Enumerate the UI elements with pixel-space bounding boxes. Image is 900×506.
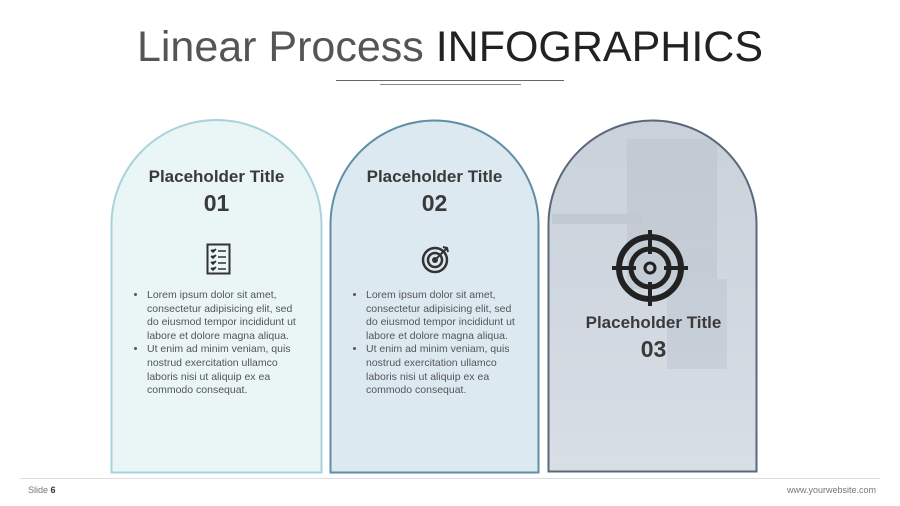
card 2 heading: [367, 167, 502, 216]
card 2 bullets: Ut enim ad minim veniam, quis nostrud exercitation ullamco laboris nisi ut aliquip ex ea commodo consequat.: [366, 343, 510, 396]
card 1 bullets: Lorem ipsum dolor sit amet, consectetur adipisicing elit, sed do eiusmod tempor incididunt ut labore et dolore magna aliqua.: [147, 289, 296, 342]
card 1 bullets: [134, 289, 296, 396]
card 1 bullets: Ut enim ad minim veniam, quis nostrud exercitation ullamco laboris nisi ut aliquip ex ea commodo consequat.: [147, 343, 291, 396]
card 1 heading: Placeholder Title: [149, 167, 284, 186]
card 3 heading: Placeholder Title: [586, 313, 721, 332]
footer: slide number: Slide 6: [28, 485, 56, 495]
card 2: [330, 120, 540, 474]
card 2 heading: Placeholder Title: [367, 167, 502, 186]
card 2 bullets: Lorem ipsum dolor sit amet, consectetur adipisicing elit, sed do eiusmod tempor incididunt ut labore et dolore magna aliqua.: [366, 289, 515, 342]
card 3 heading: [586, 313, 721, 362]
card 3 with photo: [548, 120, 758, 472]
card 1 heading: [149, 167, 284, 216]
card 1 heading: 01: [204, 190, 229, 216]
icon: crosshair: [612, 230, 688, 306]
card 2 heading: 02: [422, 190, 447, 216]
icon: dartboard: [422, 246, 449, 274]
footer: website: www.yourwebsite.com: [787, 485, 876, 495]
title: Linear Process INFOGRAPHICS: [137, 23, 763, 71]
card 3 heading: 03: [641, 336, 666, 362]
card 2 bullets: [353, 289, 515, 396]
icon: checklist: [206, 244, 230, 274]
card 1: [110, 119, 322, 474]
